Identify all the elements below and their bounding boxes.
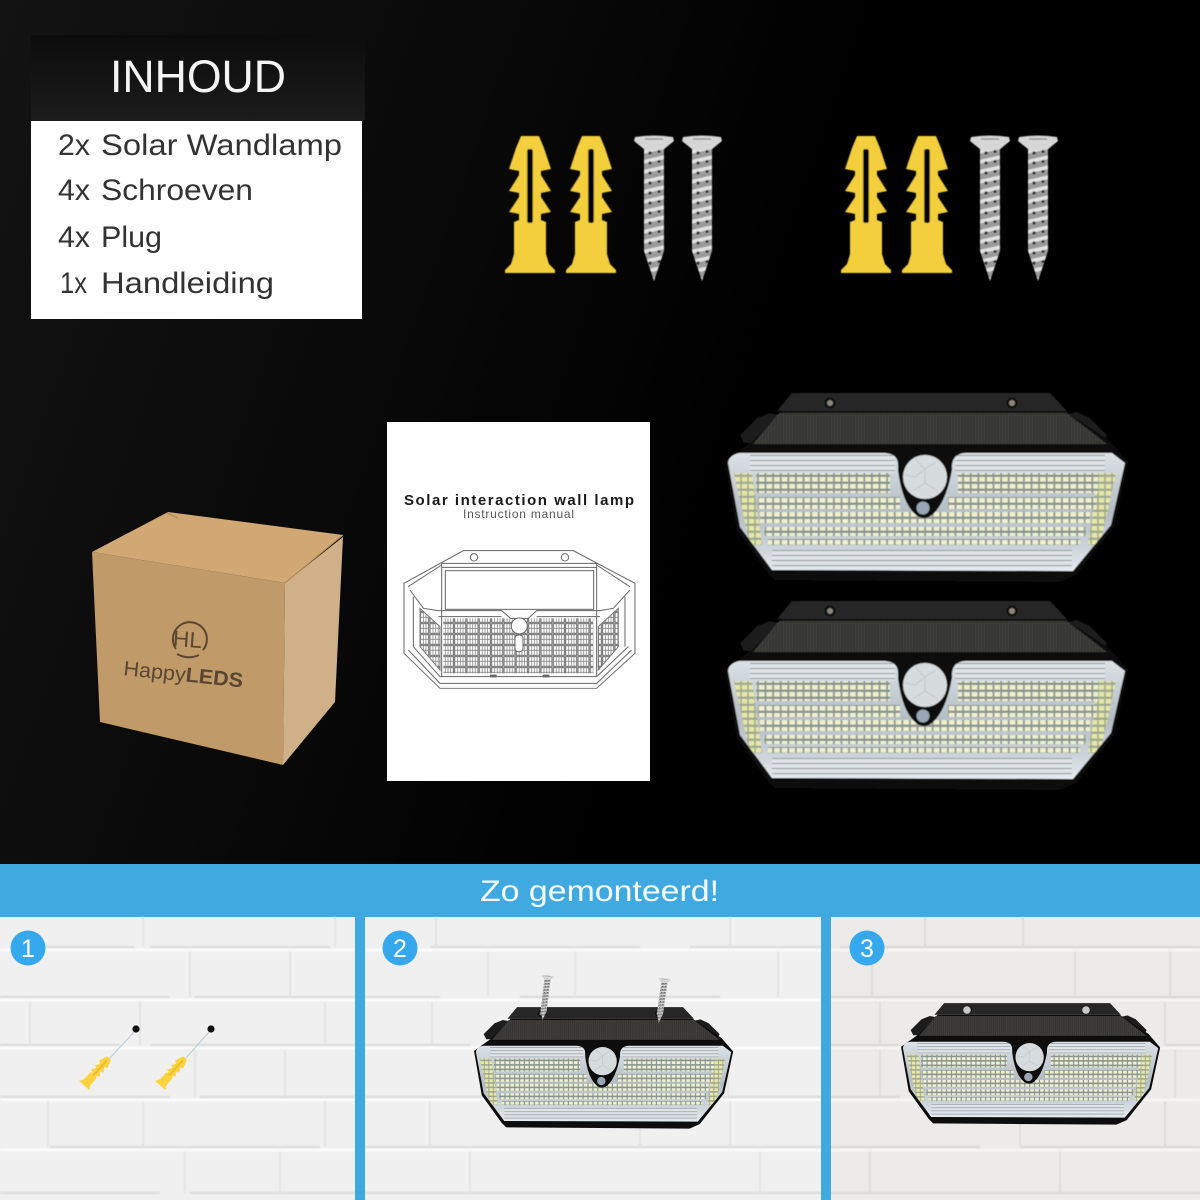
brick wall 1 [0,917,355,1193]
list of contents: 4x [58,174,90,207]
box logo: HL [172,626,203,653]
list of contents: Plug [101,221,162,254]
panel: step 2 [365,917,821,1200]
mounted lamp [901,1003,1160,1125]
banner: zo gemonteerd: Zo gemonteerd! [480,875,719,908]
cardboard box [92,512,343,765]
panel: inhoud [31,35,365,319]
box logo: HappyLEDS [122,657,244,693]
plugs and screws set 1 [505,136,722,281]
manual line drawing [404,551,635,688]
list of contents: 1x [60,267,87,300]
box logo [122,622,244,693]
plugs and screws set 2 [841,136,1058,281]
drill holes [132,1025,215,1033]
list of contents: 4x [58,221,90,254]
panel: step 3 [831,917,1200,1200]
background [0,0,1200,864]
heading: inhoud [31,35,365,121]
panel: step 1 [0,917,355,1200]
instruction manual: Instruction manual [463,507,574,521]
list of contents: 2x [58,129,90,162]
step number 1 [10,930,46,966]
heading: inhoud: INHOUD [110,51,286,102]
step number 2: 2 [393,935,407,963]
list of contents [31,121,362,319]
lamp 2 [725,601,1128,790]
plugs on wall [79,1053,190,1090]
banner: zo gemonteerd [0,864,1200,917]
step number 2 [382,930,418,966]
blue dividers [355,917,831,1200]
instruction manual [387,422,650,781]
list of contents: Solar Wandlamp [101,129,342,162]
brick wall 3 [831,917,1200,1193]
step number 3 [850,930,884,966]
instruction manual: Solar interaction wall lamp [404,492,634,509]
lamp 1 [725,393,1128,582]
step number 1: 1 [21,935,35,963]
step number 3: 3 [860,935,874,963]
guide lines [110,1032,209,1058]
brick wall 2 [365,917,821,1193]
list of contents: Handleiding [101,267,274,300]
lamp with screws [474,974,733,1129]
list of contents: Schroeven [101,174,253,207]
